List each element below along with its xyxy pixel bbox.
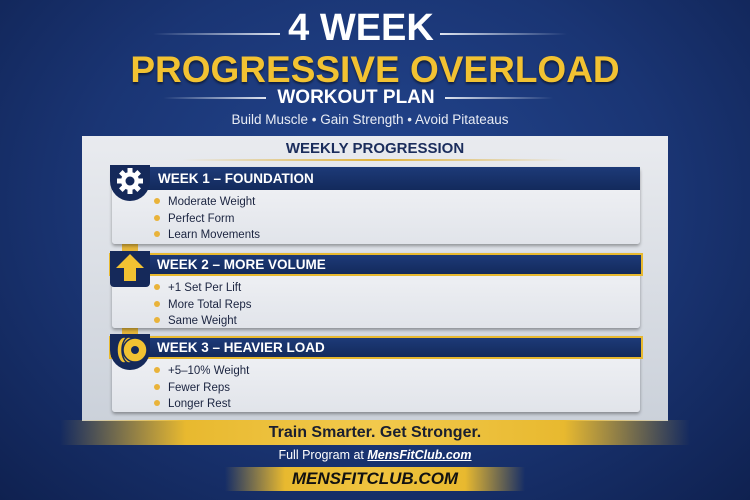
week 2 card: Same Weight: [168, 315, 237, 327]
week 1 card: Learn Movements: [168, 229, 260, 241]
week 3 card: [112, 336, 640, 412]
subtitle: workout plan: WORKOUT PLAN: [277, 87, 435, 108]
week 3 card: WEEK 3 – HEAVIER LOAD: [157, 340, 325, 355]
panel: weekly progression: [82, 136, 668, 421]
icon: up arrow: [110, 251, 150, 287]
week 3 card: +5–10% Weight: [168, 365, 249, 377]
tagline: Build Muscle • Gain Strength • Avoid Pitateaus: [231, 112, 509, 127]
title: 4 week: 4 WEEK: [288, 7, 434, 49]
footer text: full program: Full Program at MensFitClub.com: [278, 448, 472, 462]
title: progressive overload: PROGRESSIVE OVERLOAD: [130, 49, 620, 90]
week 2 card: WEEK 2 – MORE VOLUME: [157, 257, 326, 272]
footer band: slogan: [60, 420, 690, 445]
footer band: site: MENSFITCLUB.COM: [292, 469, 458, 488]
week 1 card: Moderate Weight: [168, 196, 255, 208]
week 2 card: [112, 253, 640, 328]
connectors: [122, 244, 138, 254]
week 2 card: More Total Reps: [168, 298, 252, 310]
icon: gear: [110, 165, 150, 201]
week 1 card: WEEK 1 – FOUNDATION: [158, 171, 314, 186]
footer band: slogan: Train Smarter. Get Stronger.: [269, 424, 481, 441]
week 1 card: [112, 167, 640, 244]
icon: weight plates: [110, 334, 150, 370]
week 2 card: +1 Set Per Lift: [168, 282, 241, 294]
footer band: site: [225, 467, 525, 491]
heading: WEEKLY PROGRESSION: [286, 140, 464, 157]
week 3 card: Longer Rest: [168, 398, 231, 410]
week 3 card: Fewer Reps: [168, 382, 230, 394]
week 1 card: Perfect Form: [168, 212, 234, 224]
